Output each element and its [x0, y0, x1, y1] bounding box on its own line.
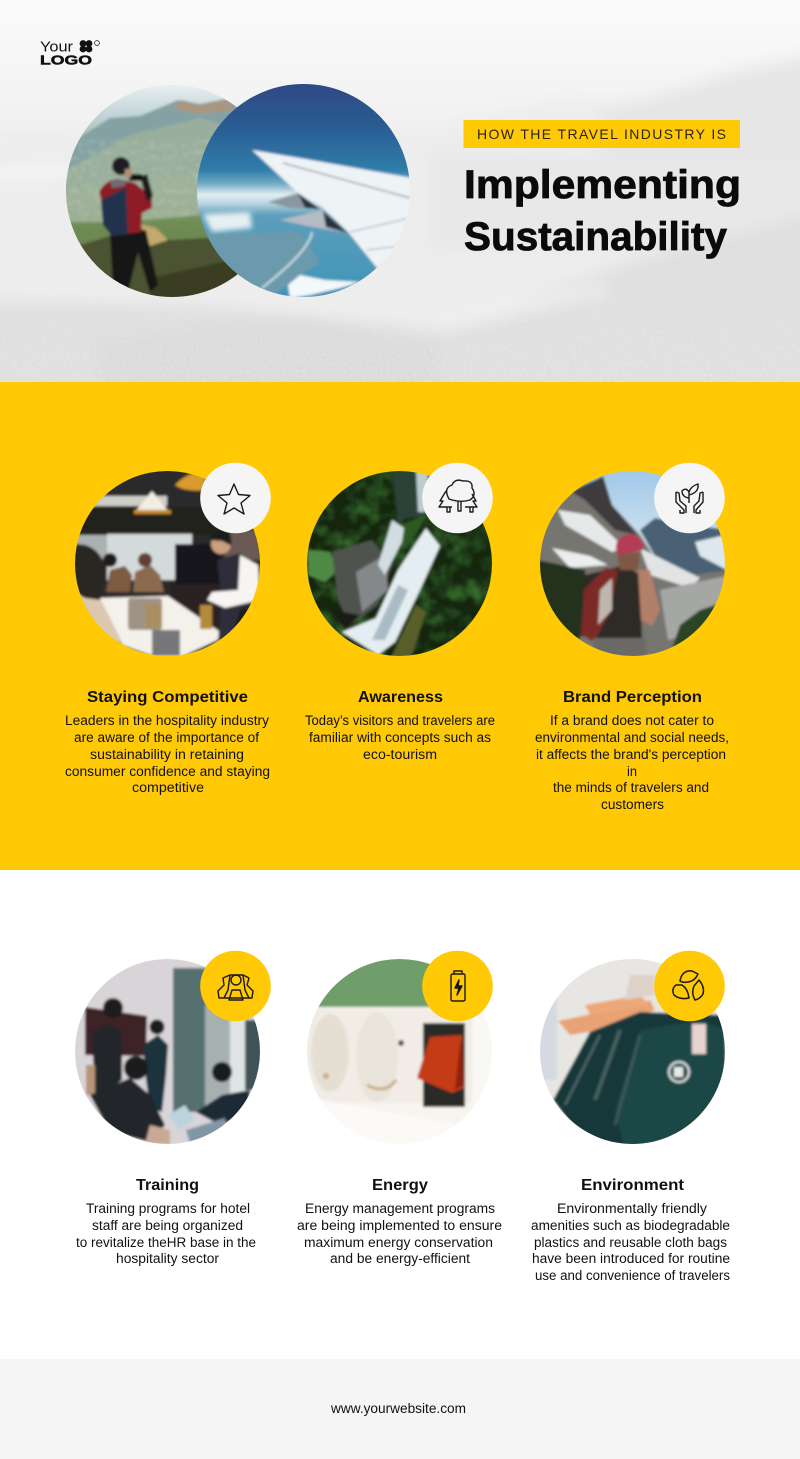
body text: amenities such as biodegradable: [531, 1218, 730, 1233]
logo: [40, 38, 99, 68]
body text: the minds of travelers and: [553, 780, 709, 795]
title: Implementing: [464, 163, 741, 207]
body text: and be energy-efficient: [330, 1251, 470, 1266]
photo: t-shirts on hangers: [535, 955, 730, 1150]
panel: footer: [0, 1359, 800, 1459]
heading: Brand Perception: [563, 689, 702, 706]
panel: yellow section: [0, 382, 800, 870]
body text: [76, 1201, 256, 1266]
photo: power strip switch: [307, 959, 492, 1126]
card: staying competitive: [65, 463, 271, 795]
heading: Awareness: [358, 689, 443, 706]
body text: environmental and social needs,: [535, 730, 729, 745]
body text: [305, 713, 495, 762]
card: training: [70, 951, 271, 1266]
body text: have been introduced for routine: [532, 1251, 730, 1266]
photo: waterfall: [307, 471, 492, 656]
body text: familiar with concepts such as: [309, 730, 491, 745]
logo: LOGO: [40, 52, 92, 68]
icon badge: star: [200, 463, 271, 533]
logo flower mark: [80, 40, 92, 52]
body text: [65, 713, 270, 795]
website link text: www.yourwebsite.com: [330, 1401, 466, 1416]
body text: Environmentally friendly: [557, 1201, 707, 1216]
body text: Leaders in the hospitality industry: [65, 713, 269, 728]
body text: [297, 1201, 502, 1266]
title: Sustainability: [464, 215, 728, 259]
icon badge: trees: [422, 463, 493, 533]
icon badge: hands and plant: [654, 463, 725, 533]
tag: subtitle: [464, 120, 740, 148]
icon badge: battery: [422, 951, 493, 1021]
body text: [531, 1201, 730, 1283]
photo: training room: [70, 955, 265, 1150]
body text: are aware of the importance of: [74, 730, 259, 745]
body text: Energy management programs: [305, 1201, 495, 1216]
body text: If a brand does not cater to: [550, 713, 714, 728]
hiker: [99, 157, 158, 292]
photo: hotel staff at bar: [75, 471, 260, 656]
body text: use and convenience of travelers: [535, 1268, 730, 1283]
body text: [535, 713, 729, 812]
heading: Energy: [372, 1177, 428, 1194]
body text: plastics and reusable cloth bags: [534, 1235, 727, 1250]
heading: Environment: [581, 1177, 684, 1194]
body text: competitive: [132, 780, 204, 795]
body text: are being implemented to ensure: [297, 1218, 502, 1233]
heading: Staying Competitive: [87, 689, 248, 706]
body text: hospitality sector: [116, 1251, 220, 1266]
title: [464, 163, 741, 259]
body text: Training programs for hotel: [86, 1201, 250, 1216]
body text: staff are being organized: [92, 1218, 243, 1233]
card: brand perception: [535, 463, 730, 812]
registered mark: [95, 41, 99, 45]
body text: eco-tourism: [363, 747, 437, 762]
body text: maximum energy conservation: [304, 1235, 493, 1250]
body text: in: [627, 764, 637, 779]
photo: airplane wing: [197, 84, 410, 297]
body text: it affects the brand's perception: [536, 747, 726, 762]
card: environment: [531, 951, 730, 1283]
heading: Training: [136, 1177, 199, 1194]
panel: hero header: [0, 40, 800, 382]
card: energy: [297, 951, 502, 1266]
body text: Today’s visitors and travelers are: [305, 713, 495, 728]
body text: to revitalize theHR base in the: [76, 1235, 256, 1250]
body text: sustainability in retaining: [90, 747, 244, 762]
logo: Your: [40, 38, 73, 56]
icon badge: leaves recycle: [654, 951, 725, 1021]
photo: hiker on mountain: [66, 85, 238, 297]
hero background mountains: [0, 40, 800, 382]
body text: consumer confidence and staying: [65, 764, 270, 779]
body text: customers: [601, 797, 664, 812]
card: awareness: [300, 463, 500, 762]
icon badge: team: [200, 951, 271, 1021]
tag: subtitle: HOW THE TRAVEL INDUSTRY IS: [477, 126, 726, 142]
photo: hiker and snowy mountains: [535, 465, 730, 660]
